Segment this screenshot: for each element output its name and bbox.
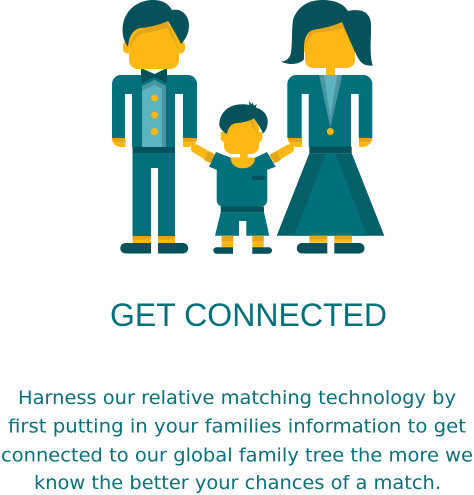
body paragraph: first putting in your families information to get [8, 416, 466, 438]
child chest and neck [231, 154, 255, 168]
mother face [305, 25, 355, 68]
father jacket and arms [112, 75, 197, 147]
father ears [123, 41, 185, 54]
child ears [221, 132, 262, 142]
mother belt [309, 147, 352, 153]
father hands [112, 138, 197, 147]
mother ears [300, 39, 360, 52]
child arms [191, 144, 294, 163]
father buttons [151, 94, 158, 135]
mother lapels [319, 75, 342, 128]
father vest [142, 80, 166, 147]
child pocket [252, 176, 265, 180]
father socks [132, 236, 175, 243]
mother skirt [277, 153, 384, 236]
body paragraph [1, 387, 473, 494]
figure: father [112, 0, 197, 254]
body paragraph: know the better your chances of a match. [34, 472, 441, 494]
father trousers [132, 153, 175, 236]
title: GET CONNECTED [110, 297, 387, 333]
mother neck [326, 66, 335, 75]
child shorts [215, 212, 269, 236]
child belt [221, 207, 264, 212]
figure: child [191, 101, 294, 254]
figure: mother [277, 0, 384, 254]
mother hair [281, 0, 373, 66]
mother pendant [327, 128, 334, 135]
child arm shading [204, 152, 281, 163]
father belt [132, 147, 175, 153]
child shirt [209, 152, 276, 207]
body paragraph: connected to our global family tree the more we [1, 444, 473, 466]
mother shoes [297, 243, 365, 254]
body paragraph: Harness our relative matching technology by [18, 387, 456, 409]
child socks [222, 236, 264, 247]
child hair [219, 101, 268, 134]
mother socks [309, 236, 352, 243]
mother hands [288, 138, 372, 147]
father shoes [120, 243, 188, 254]
father hair [123, 0, 189, 47]
child face [224, 118, 259, 154]
father face [129, 25, 179, 69]
father bow tie [141, 68, 167, 83]
mother jacket and arms [287, 75, 372, 147]
child shoes [213, 247, 272, 254]
